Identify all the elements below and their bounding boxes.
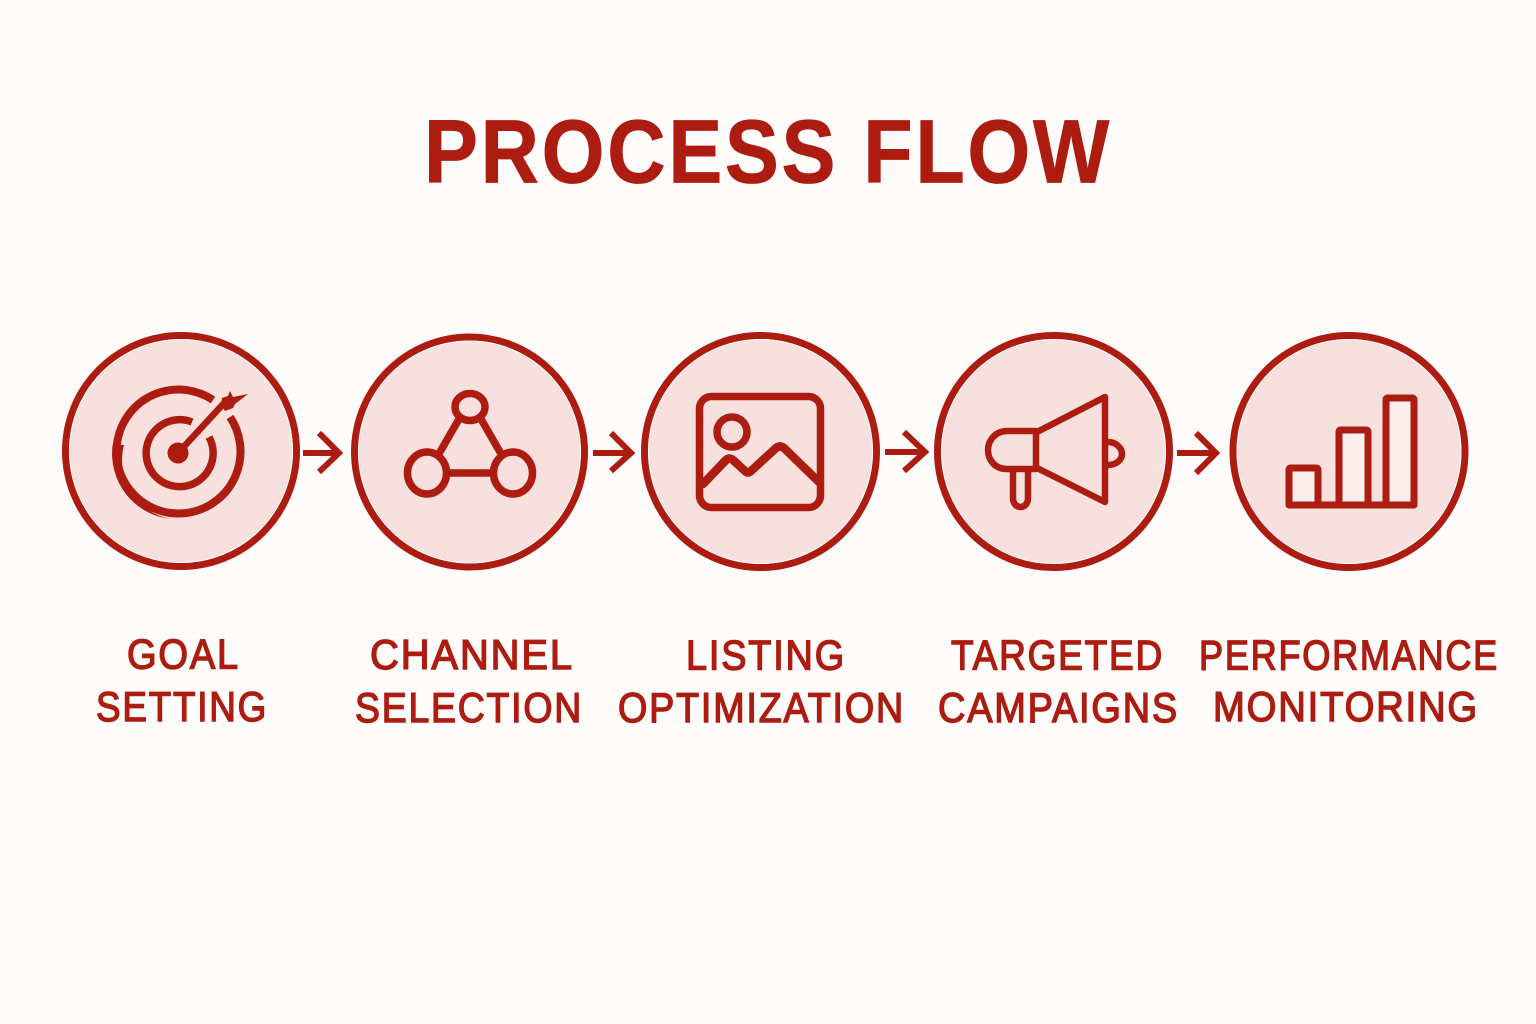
arrow 2 <box>593 433 631 471</box>
label: performance monitoring <box>1199 632 1499 730</box>
label: channel selection: CHANNEL <box>370 631 574 678</box>
label: goal setting: SETTING <box>96 683 268 730</box>
arrow 3 <box>885 432 925 471</box>
arrow 4 <box>1177 433 1216 473</box>
circle: channel selection <box>354 337 584 567</box>
icon: target with arrow <box>112 390 248 519</box>
circle: goal setting <box>66 336 296 566</box>
circle: targeted campaigns <box>938 336 1170 568</box>
icon: image picture <box>700 396 820 508</box>
icon: connected nodes <box>408 394 532 494</box>
circle: performance monitoring <box>1233 336 1465 568</box>
label: listing optimization: OPTIMIZATION <box>618 684 905 731</box>
label: goal setting: GOAL <box>127 630 240 678</box>
step 4: targeted campaigns <box>938 336 1179 731</box>
label: channel selection: SELECTION <box>355 684 583 731</box>
circle: listing optimization <box>644 336 876 568</box>
label: targeted campaigns: TARGETED <box>951 632 1164 678</box>
label: listing optimization: LISTING <box>686 632 846 678</box>
step 3: listing optimization <box>618 336 905 731</box>
icon: bar chart <box>1289 398 1414 505</box>
label: performance monitoring: MONITORING <box>1213 683 1479 730</box>
step 2: channel selection <box>354 337 584 731</box>
title: PROCESS FLOW <box>424 102 1112 202</box>
label: targeted campaigns: CAMPAIGNS <box>938 684 1179 731</box>
icon: megaphone <box>988 397 1122 507</box>
step 5: performance monitoring <box>1199 336 1499 730</box>
label: listing optimization <box>618 632 905 731</box>
label: channel selection <box>355 631 583 731</box>
label: goal setting <box>96 630 268 730</box>
label: targeted campaigns <box>938 632 1179 731</box>
arrow 1 <box>303 433 339 472</box>
step 1: goal setting <box>66 336 296 730</box>
